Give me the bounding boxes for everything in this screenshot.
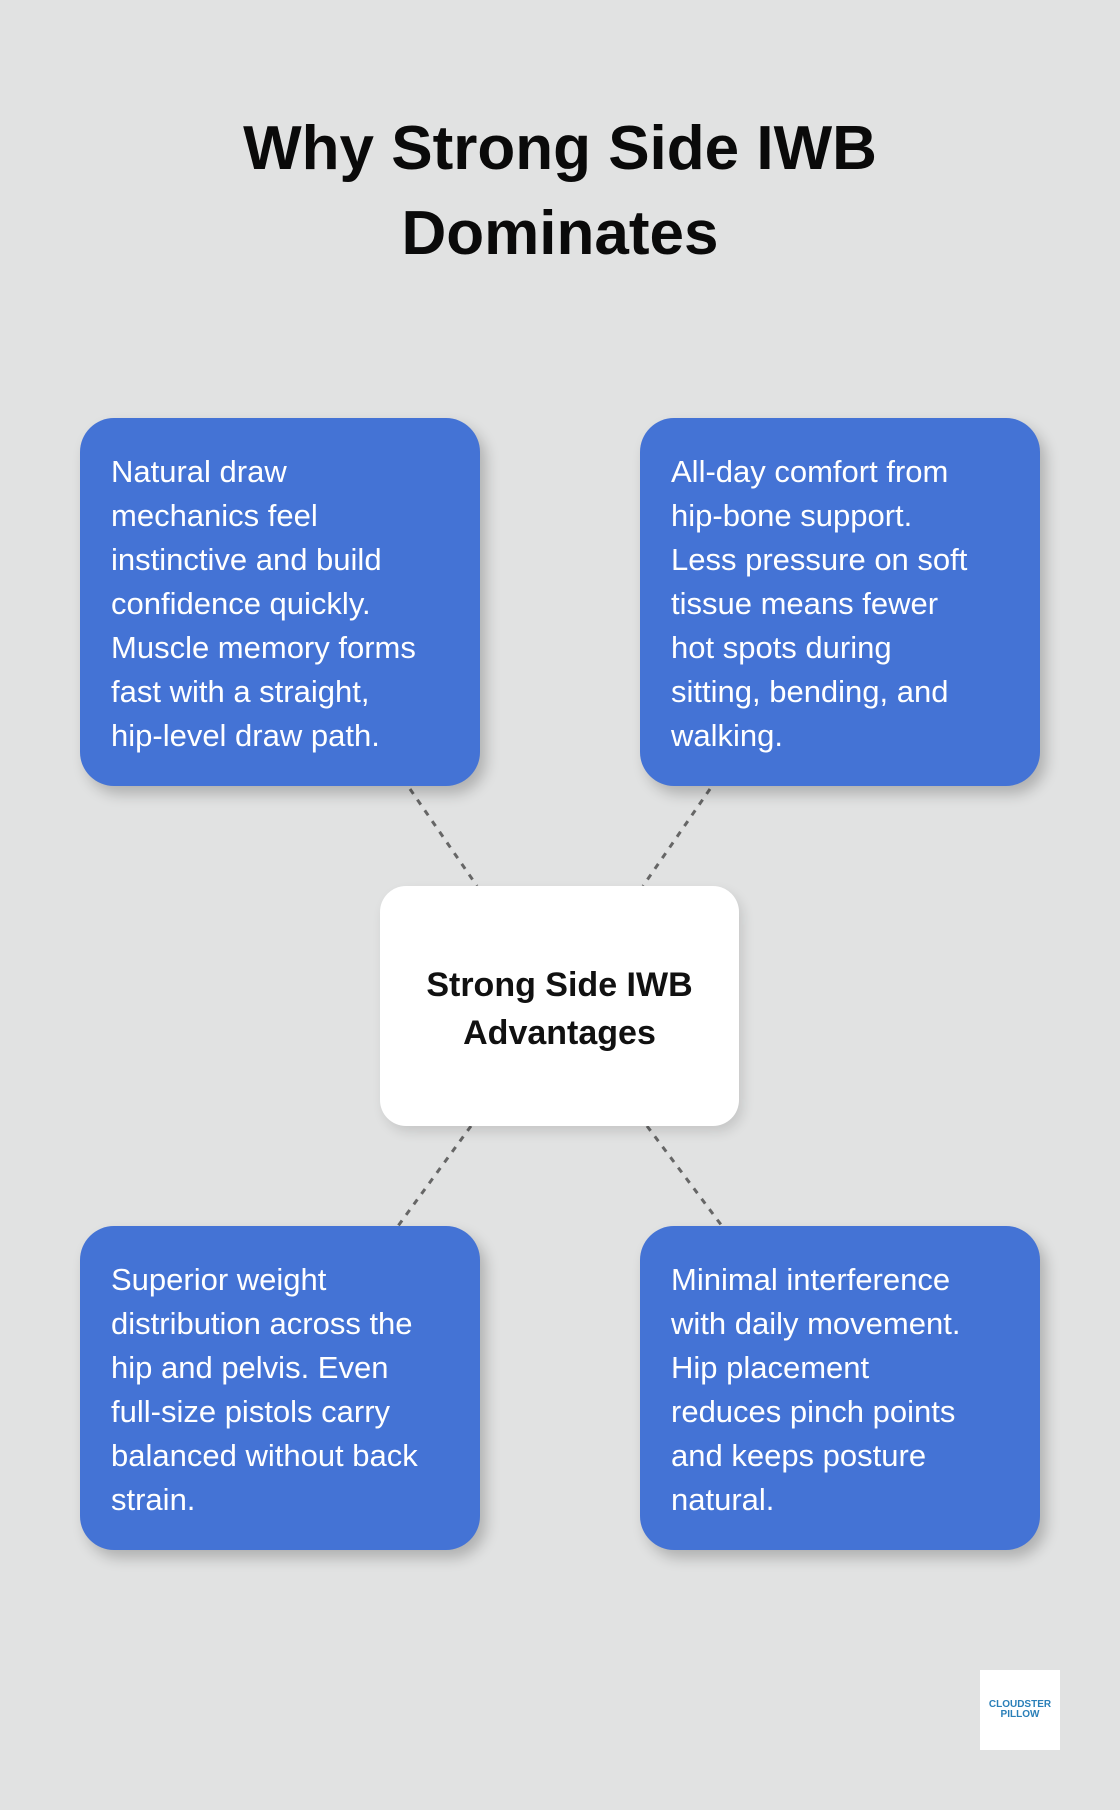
panel: minimal interference bbox=[640, 1226, 1040, 1550]
panel: all-day comfort bbox=[640, 418, 1040, 786]
panel: all-day comfort: All-day comfort from bbox=[671, 454, 948, 489]
panel: natural draw: instinctive and build bbox=[111, 542, 382, 577]
panel: minimal interference: Minimal interference bbox=[671, 1262, 950, 1297]
panel: minimal interference: natural. bbox=[671, 1482, 774, 1517]
panel: natural draw: mechanics feel bbox=[111, 498, 318, 533]
panel: weight distribution: balanced without back bbox=[111, 1438, 418, 1473]
logo: PILLOW bbox=[1001, 1709, 1039, 1720]
panel: weight distribution: strain. bbox=[111, 1482, 195, 1517]
panel: all-day comfort: hip-bone support. bbox=[671, 498, 912, 533]
panel: weight distribution: distribution across the bbox=[111, 1306, 413, 1341]
panel: weight distribution: full-size pistols carry bbox=[111, 1394, 390, 1429]
panel: minimal interference: reduces pinch points bbox=[671, 1394, 955, 1429]
title: Why Strong Side IWB bbox=[243, 114, 877, 183]
panel: all-day comfort: tissue means fewer bbox=[671, 586, 938, 621]
logo bbox=[980, 1670, 1060, 1750]
panel: weight distribution: Superior weight bbox=[111, 1262, 326, 1297]
panel: natural draw: Muscle memory forms bbox=[111, 630, 416, 665]
panel: natural draw bbox=[80, 418, 480, 786]
logo: CLOUDSTER bbox=[989, 1699, 1051, 1710]
center node bbox=[380, 886, 739, 1126]
panel: natural draw: fast with a straight, bbox=[111, 674, 369, 709]
panel: natural draw: confidence quickly. bbox=[111, 586, 371, 621]
panel: minimal interference: Hip placement bbox=[671, 1350, 869, 1385]
panel: natural draw: hip-level draw path. bbox=[111, 718, 380, 753]
panel: minimal interference: and keeps posture bbox=[671, 1438, 926, 1473]
panel: all-day comfort: walking. bbox=[671, 718, 783, 753]
center node: Advantages bbox=[463, 1014, 656, 1052]
title bbox=[243, 114, 877, 268]
panel: weight distribution: hip and pelvis. Even bbox=[111, 1350, 388, 1385]
panel: minimal interference: with daily movement. bbox=[671, 1306, 960, 1341]
center node: Strong Side IWB bbox=[426, 966, 693, 1004]
panel: natural draw: Natural draw bbox=[111, 454, 287, 489]
title: Dominates bbox=[402, 199, 718, 268]
panel: all-day comfort: sitting, bending, and bbox=[671, 674, 948, 709]
panel: weight distribution bbox=[80, 1226, 480, 1550]
panel: all-day comfort: Less pressure on soft bbox=[671, 542, 967, 577]
panel: all-day comfort: hot spots during bbox=[671, 630, 892, 665]
